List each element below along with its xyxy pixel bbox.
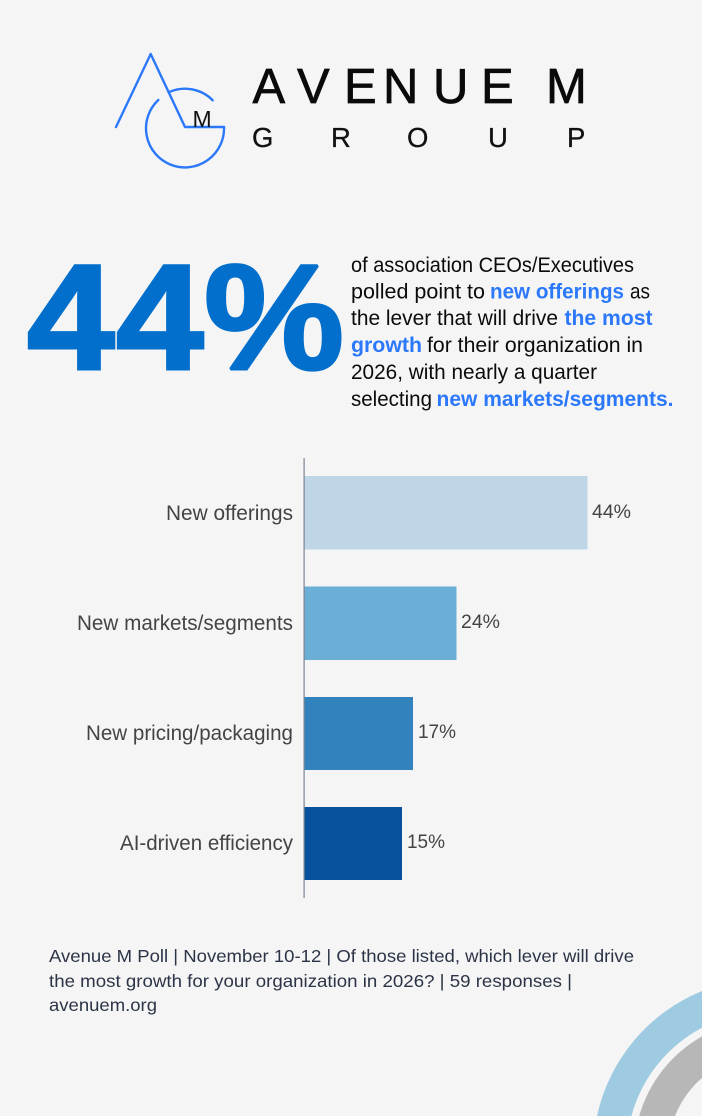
bar: New markets/segments 24% [77, 586, 500, 660]
logo icon [116, 54, 224, 167]
bar: New markets/segments 24%: 24% [461, 611, 500, 633]
footnote source text [49, 946, 634, 1015]
logo: Avenue M Group [116, 54, 587, 167]
logo wordmark: Group: GROUP [252, 122, 585, 153]
footnote source text: the most growth for your organization in 2026? | 59 responses | [49, 971, 572, 991]
logo small M: M [192, 106, 212, 132]
bar: New markets/segments 24%: New markets/segments [77, 612, 293, 635]
bar: AI-driven efficiency 15%: AI-driven efficiency [120, 832, 293, 855]
bar: New offerings 44%: 44% [592, 501, 631, 523]
statement text block: the lever that will drive [351, 307, 558, 330]
footnote source text: avenuem.org [49, 995, 157, 1015]
statement text block [351, 254, 674, 411]
bar: New pricing/packaging 17%: New pricing/packaging [86, 722, 293, 745]
statement text block: new offerings [490, 281, 624, 304]
statement text block: selecting [351, 388, 432, 411]
statement text block: new markets/segments. [436, 388, 674, 411]
statement text block: for their organization in [427, 334, 643, 357]
bar: New offerings 44% [166, 476, 631, 550]
bar: AI-driven efficiency 15%: 15% [407, 831, 445, 853]
bar: New offerings 44%: New offerings [166, 502, 293, 525]
statement text block: polled point to [351, 281, 485, 304]
logo wordmark: Avenue M: AVENUE M [252, 60, 587, 114]
bar: New pricing/packaging 17% [86, 697, 456, 770]
decorative corner arcs [597, 991, 702, 1116]
bar: New pricing/packaging 17%: 17% [418, 721, 456, 743]
statement text block: growth [351, 334, 422, 357]
statement text block: as [630, 281, 650, 304]
big statistic: 44%: 44% [27, 233, 344, 401]
bar chart [77, 458, 631, 898]
statement text block: the most [564, 307, 652, 330]
bar: AI-driven efficiency 15% [120, 807, 445, 880]
statement text block: of association CEOs/Executives [351, 254, 634, 277]
footnote source text: Avenue M Poll | November 10-12 | Of those listed, which lever will drive [49, 946, 634, 966]
statement text block: 2026, with nearly a quarter [351, 361, 597, 384]
